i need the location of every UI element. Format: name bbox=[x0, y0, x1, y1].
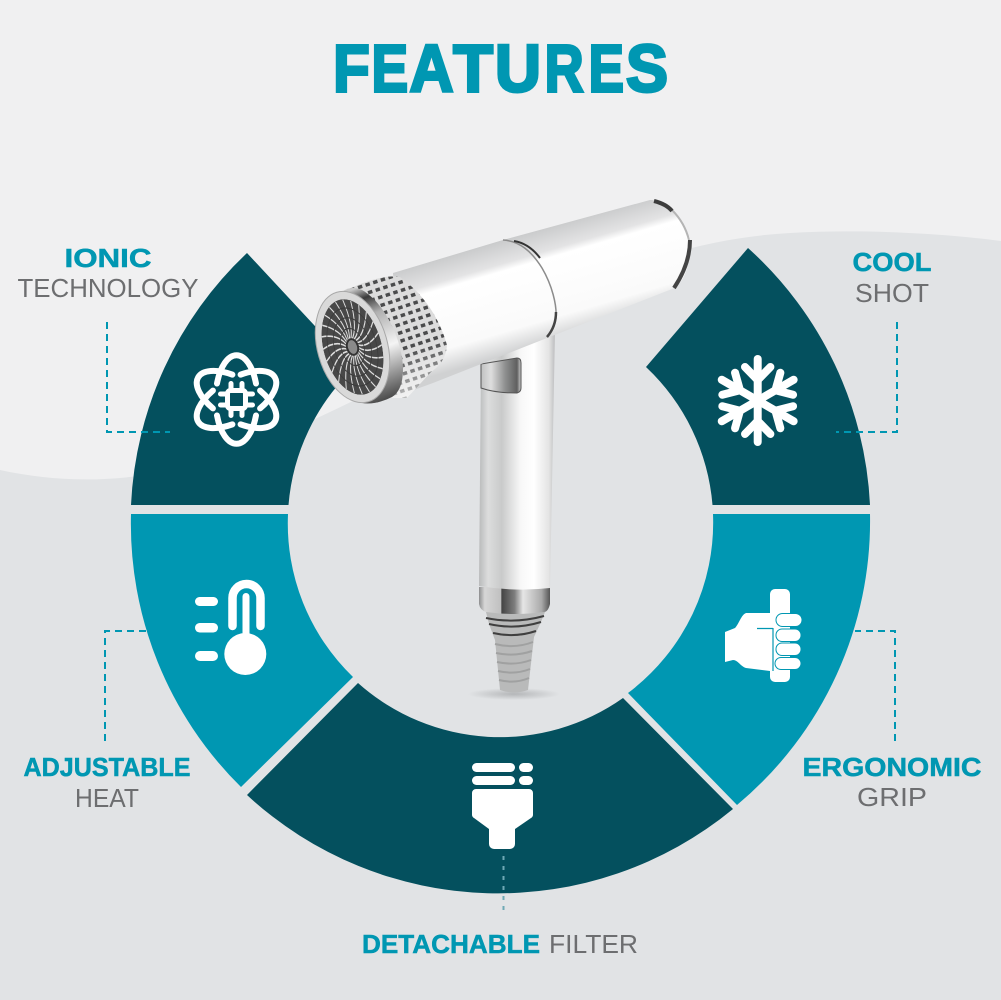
icon: hand gripping handle bbox=[725, 589, 802, 682]
dryer shadow bbox=[468, 688, 560, 700]
label: detachable filter: FILTER bbox=[549, 929, 638, 959]
label: detachable filter: DETACHABLE bbox=[362, 929, 540, 959]
dryer collar bbox=[479, 587, 550, 614]
dryer handle bbox=[479, 330, 555, 590]
connector: detachable filter bbox=[502, 856, 504, 916]
title: T bbox=[453, 32, 493, 106]
feature ring bbox=[131, 248, 870, 893]
dryer cord guard bbox=[486, 612, 545, 692]
title: E bbox=[372, 32, 408, 106]
connector: cool shot bbox=[836, 322, 897, 432]
icon: thermometer bbox=[195, 584, 266, 675]
label: ionic technology: IONIC bbox=[64, 243, 152, 273]
title: A bbox=[410, 32, 454, 106]
label: ergonomic grip: GRIP bbox=[857, 782, 927, 812]
label: ergonomic grip bbox=[802, 752, 982, 812]
segment: adjustable heat bbox=[131, 514, 353, 787]
title: U bbox=[495, 32, 541, 106]
label: ionic technology bbox=[18, 243, 198, 303]
icon: chip bbox=[220, 384, 252, 416]
label: cool shot: SHOT bbox=[855, 278, 929, 308]
title: E bbox=[589, 32, 624, 106]
connector: adjustable heat bbox=[105, 631, 147, 741]
hair dryer bbox=[303, 200, 690, 700]
icon: atom with chip bbox=[188, 355, 285, 444]
segment: ionic technology bbox=[131, 253, 354, 505]
segment: cool shot bbox=[646, 248, 870, 505]
dryer knurled head bbox=[345, 276, 447, 398]
dryer rear cap bbox=[654, 201, 690, 288]
title: F bbox=[333, 32, 370, 106]
segment: ergonomic grip bbox=[628, 514, 870, 805]
label: adjustable heat: HEAT bbox=[75, 783, 139, 813]
dryer front face bbox=[314, 290, 390, 404]
label: ionic technology: TECHNOLOGY bbox=[18, 273, 198, 303]
dryer slot bbox=[481, 358, 521, 393]
title: R bbox=[545, 32, 584, 106]
label: adjustable heat bbox=[24, 752, 190, 813]
label: detachable filter bbox=[362, 929, 638, 959]
label: adjustable heat: ADJUSTABLE bbox=[24, 752, 190, 782]
connector: ergonomic grip bbox=[855, 631, 895, 741]
title: S bbox=[626, 32, 668, 106]
label: cool shot: COOL bbox=[852, 247, 932, 277]
label: ergonomic grip: ERGONOMIC bbox=[802, 752, 982, 782]
segment: detachable filter bbox=[247, 683, 733, 893]
label: cool shot bbox=[852, 247, 932, 308]
dryer seam bbox=[503, 240, 556, 337]
connector: ionic bbox=[107, 322, 170, 432]
dryer knurl highlight bbox=[345, 276, 447, 398]
icon: snowflake bbox=[715, 359, 800, 442]
dryer chrome rim bbox=[343, 288, 403, 404]
dryer barrel bbox=[393, 200, 690, 395]
icon: filter bbox=[472, 763, 533, 849]
